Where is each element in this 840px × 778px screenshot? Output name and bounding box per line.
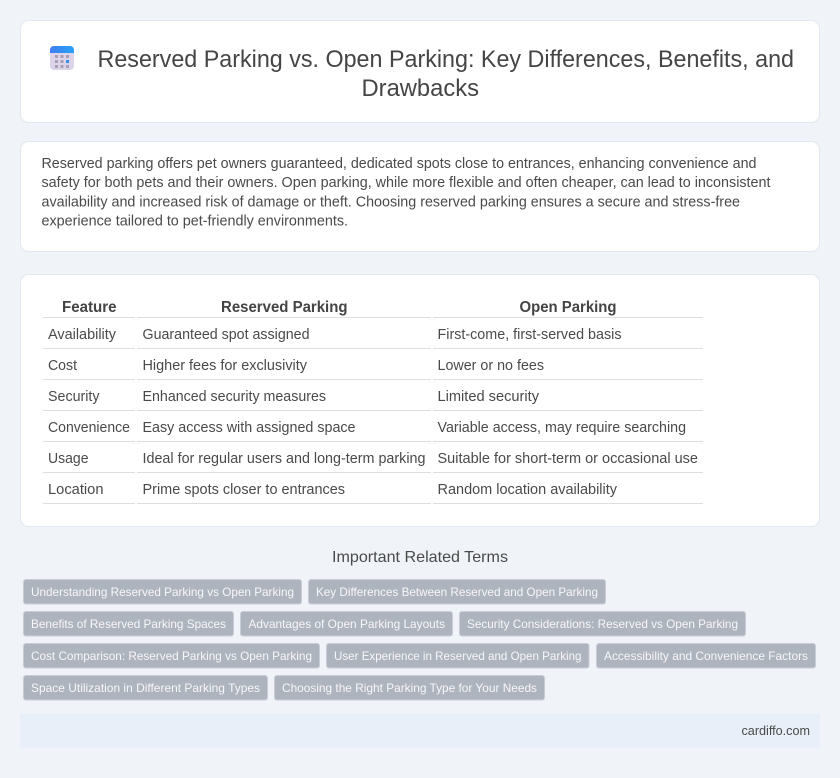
row: security: Enhanced security measures bbox=[142, 389, 326, 405]
intro paragraph bbox=[42, 156, 770, 230]
related terms tags bbox=[24, 580, 816, 700]
row: cost: Higher fees for exclusivity bbox=[142, 358, 308, 374]
row: security bbox=[43, 389, 703, 411]
icon: calendar bbox=[50, 46, 74, 70]
tag: user experience: User Experience in Reserved and Open Parking bbox=[334, 649, 582, 663]
row: availability: First-come, first-served basis bbox=[438, 327, 622, 343]
panel: title header bbox=[20, 20, 820, 122]
tag: advantages bbox=[240, 612, 452, 636]
tag: key differences bbox=[308, 580, 606, 604]
tag: user experience bbox=[326, 644, 589, 668]
title: Reserved Parking vs. Open Parking: Key Differences, Benefits, and bbox=[98, 46, 794, 73]
tag: security considerations bbox=[460, 612, 746, 636]
table header row: Open Parking bbox=[520, 299, 616, 316]
tag: advantages: Advantages of Open Parking Layouts bbox=[248, 617, 445, 631]
tag: accessibility: Accessibility and Convenience Factors bbox=[604, 649, 808, 663]
row: security: Limited security bbox=[438, 389, 540, 405]
intro paragraph: Reserved parking offers pet owners guaranteed, dedicated spots close to entrances, enhancing convenience and bbox=[42, 156, 756, 172]
row: usage: Ideal for regular users and long-term parking bbox=[142, 451, 426, 467]
row: availability bbox=[43, 327, 703, 349]
tag: security considerations: Security Considerations: Reserved vs Open Parking bbox=[467, 617, 738, 631]
footer bar bbox=[20, 714, 820, 748]
tag: accessibility bbox=[596, 644, 816, 668]
row: usage bbox=[43, 451, 703, 473]
row: usage: Usage bbox=[48, 451, 88, 467]
row: location: Prime spots closer to entrances bbox=[142, 482, 345, 498]
tag: cost comparison: Cost Comparison: Reserved Parking vs Open Parking bbox=[31, 649, 312, 663]
row: location: Location bbox=[48, 482, 104, 498]
tag: cost comparison bbox=[24, 644, 320, 668]
title: Drawbacks bbox=[362, 75, 479, 102]
intro paragraph: experience tailored to pet-friendly environments. bbox=[42, 214, 348, 230]
table header row: Feature bbox=[62, 299, 117, 316]
title bbox=[98, 46, 794, 102]
table header row: Reserved Parking bbox=[221, 299, 348, 316]
row: availability: Guaranteed spot assigned bbox=[142, 327, 310, 343]
tag: space utilization bbox=[24, 676, 268, 700]
panel: comparison table bbox=[20, 274, 820, 526]
row: cost: Lower or no fees bbox=[438, 358, 544, 374]
row: convenience: Easy access with assigned space bbox=[142, 420, 356, 436]
row: usage: Suitable for short-term or occasional use bbox=[438, 451, 698, 467]
row: availability: Availability bbox=[48, 327, 117, 343]
panel: introduction bbox=[20, 142, 820, 252]
row: convenience bbox=[43, 420, 703, 442]
tag: choosing: Choosing the Right Parking Type for Your Needs bbox=[282, 681, 537, 695]
intro paragraph: safety for both pets and their owners. Open parking, while more flexible and often cheaper, can lead to inconsistent bbox=[42, 175, 770, 191]
row: location: Random location availability bbox=[438, 482, 618, 498]
row: location bbox=[43, 482, 703, 504]
tag: understanding bbox=[24, 580, 302, 604]
row: security: Security bbox=[48, 389, 100, 405]
tag: understanding: Understanding Reserved Parking vs Open Parking bbox=[31, 585, 294, 599]
row: cost: Cost bbox=[48, 358, 77, 374]
row: convenience: Convenience bbox=[48, 420, 130, 436]
tag: benefits bbox=[24, 612, 234, 636]
row: cost bbox=[43, 358, 703, 380]
intro paragraph: availability and increased risk of damage or theft. Choosing reserved parking ensures a secure and stress-free bbox=[42, 194, 740, 210]
heading: important related terms: Important Related Terms bbox=[332, 549, 508, 566]
tag: key differences: Key Differences Between Reserved and Open Parking bbox=[316, 585, 598, 599]
footer source: cardiffo.com bbox=[742, 723, 810, 738]
tag: space utilization: Space Utilization in Different Parking Types bbox=[31, 681, 260, 695]
table header row bbox=[43, 299, 703, 318]
tag: benefits: Benefits of Reserved Parking Spaces bbox=[31, 617, 226, 631]
tag: choosing bbox=[274, 676, 544, 700]
row: convenience: Variable access, may require searching bbox=[438, 420, 686, 436]
